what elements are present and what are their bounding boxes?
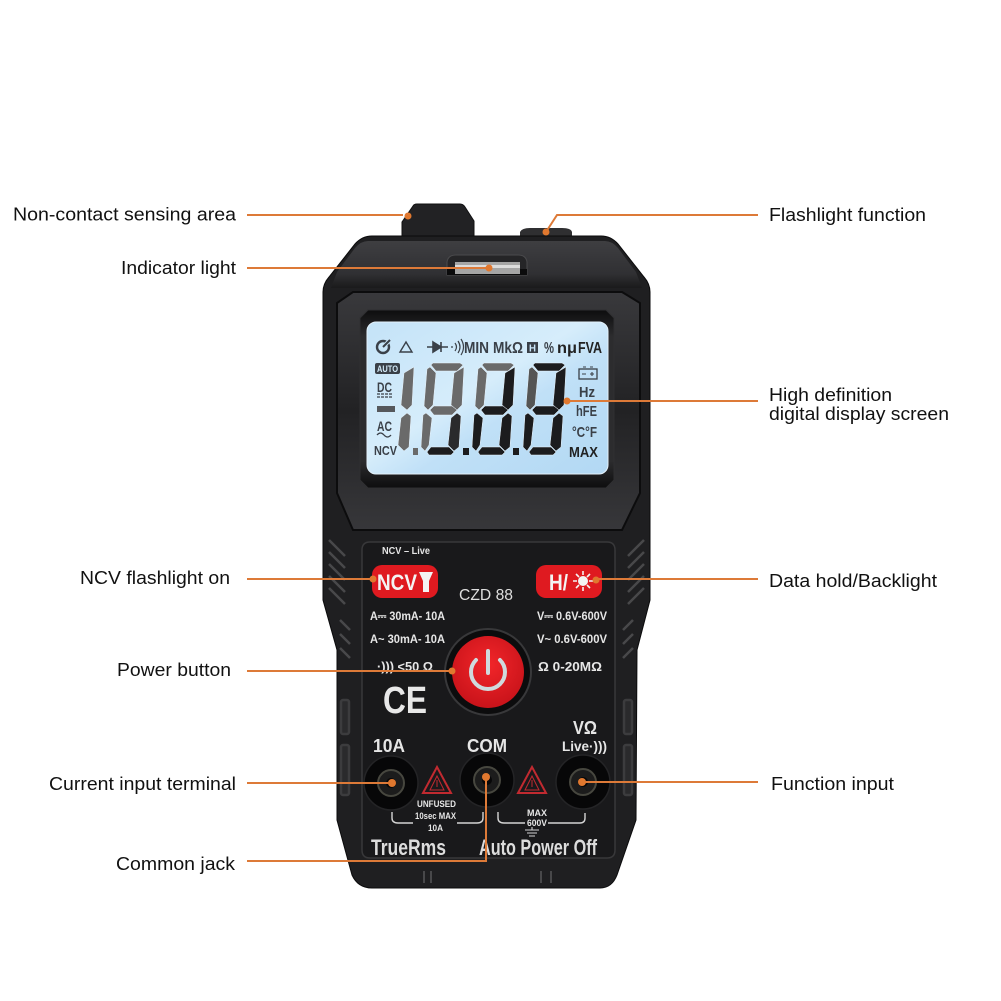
callout: flashlight function: Flashlight function [769, 205, 926, 225]
callout: non-contact sensing area: Non-contact sensing area [13, 204, 237, 224]
warning triangle left [423, 767, 451, 793]
model name: CZD 88 [459, 587, 513, 604]
left side grip [329, 540, 350, 795]
max voltage rating: 600V [527, 818, 547, 828]
unfused rating: 10sec MAX [415, 811, 456, 821]
callout: common jack [116, 773, 490, 874]
function input jack [556, 755, 610, 809]
terminal labels: COM [467, 736, 507, 756]
callout: current input terminal [49, 774, 396, 794]
max voltage rating [525, 808, 547, 836]
callout: indicator light [121, 258, 492, 278]
TrueRms label: TrueRms [371, 835, 446, 860]
rating brackets [392, 812, 585, 823]
NCV flashlight button: NCV [377, 570, 417, 595]
control panel [362, 542, 615, 860]
CE mark: CE [383, 680, 427, 722]
callout: NCV flashlight on: NCV flashlight on [80, 568, 230, 588]
top cap [331, 241, 642, 288]
LCD status icons: MkΩ [493, 340, 523, 357]
LCD left indicators [374, 363, 400, 458]
right ranges: Ω 0-20MΩ [538, 659, 602, 674]
right side grip [623, 540, 644, 795]
multimeter device [323, 204, 650, 888]
right ranges: V~ 0.6V-600V [537, 632, 607, 646]
callout: common jack: Common jack [116, 854, 236, 874]
LCD status icons: MIN [464, 340, 489, 357]
flashlight button [520, 228, 572, 237]
power button [445, 629, 531, 715]
NCV live label: NCV – Live [382, 545, 430, 557]
left ranges: ·))) <50 Ω [377, 659, 433, 674]
current input jack [364, 756, 418, 810]
screen bezel [337, 292, 640, 530]
callout: display screen [564, 385, 949, 424]
LCD left indicators: DC [377, 379, 392, 395]
LCD status icons: H [529, 344, 536, 354]
right ranges [537, 609, 607, 674]
warning triangle right [518, 767, 546, 793]
left ranges [370, 609, 445, 674]
LCD right indicators: hFE [576, 403, 597, 420]
callout: data hold and backlight: Data hold/Backlight [769, 571, 937, 591]
callout: power button: Power button [117, 660, 231, 680]
right ranges: V⎓ 0.6V-600V [537, 609, 607, 623]
LCD screen [367, 322, 608, 474]
unfused rating: 10A [428, 823, 443, 833]
callout: function input [578, 774, 894, 794]
NCV flashlight button [372, 565, 438, 598]
callout: function input: Function input [771, 774, 894, 794]
hold and backlight button: H/ [549, 570, 568, 595]
left ranges: A~ 30mA- 10A [370, 632, 445, 646]
callout: data hold and backlight [592, 571, 937, 591]
terminal labels: Live·))) [562, 738, 607, 754]
left ranges: A⎓ 30mA- 10A [370, 609, 445, 623]
LCD right indicators: Hz [579, 384, 595, 401]
callout: power button [117, 660, 456, 680]
indicator light window [447, 255, 527, 275]
LCD left indicators: NCV [374, 443, 397, 458]
callout: flashlight function [542, 205, 926, 236]
LCD status icons: % [544, 340, 554, 357]
callout: indicator light: Indicator light [121, 258, 236, 278]
callout: current input terminal: Current input terminal [49, 774, 236, 794]
common jack socket [460, 753, 514, 807]
bottom feet notches [424, 871, 551, 883]
LCD right indicators [569, 367, 598, 461]
non-contact sensor tip [402, 204, 474, 237]
device body [323, 236, 650, 888]
LCD left indicators: AC [377, 418, 392, 434]
hold and backlight button [536, 565, 602, 598]
LCD status icons: nμ [557, 340, 577, 357]
callout: display screen: digital display screen [769, 404, 949, 424]
screen inner frame [360, 310, 614, 488]
callout: display screen: High definition [769, 385, 892, 405]
terminal labels: VΩ [573, 718, 597, 738]
callout: NCV flashlight on [80, 568, 376, 588]
LCD status icons [377, 339, 602, 357]
LCD seven-segment digits 1888 [398, 363, 566, 455]
LCD left indicators: AUTO [377, 364, 398, 374]
terminal labels: 10A [373, 736, 405, 756]
terminal labels [373, 718, 607, 756]
unfused rating [415, 799, 456, 833]
LCD right indicators: °C°F [572, 424, 597, 441]
callout: non-contact sensing area [13, 204, 412, 224]
LCD right indicators: MAX [569, 444, 598, 461]
auto power off label: Auto Power Off [479, 835, 597, 860]
LCD status icons: FVA [578, 340, 602, 357]
unfused rating: UNFUSED [417, 799, 456, 809]
max voltage rating: MAX [527, 808, 547, 818]
